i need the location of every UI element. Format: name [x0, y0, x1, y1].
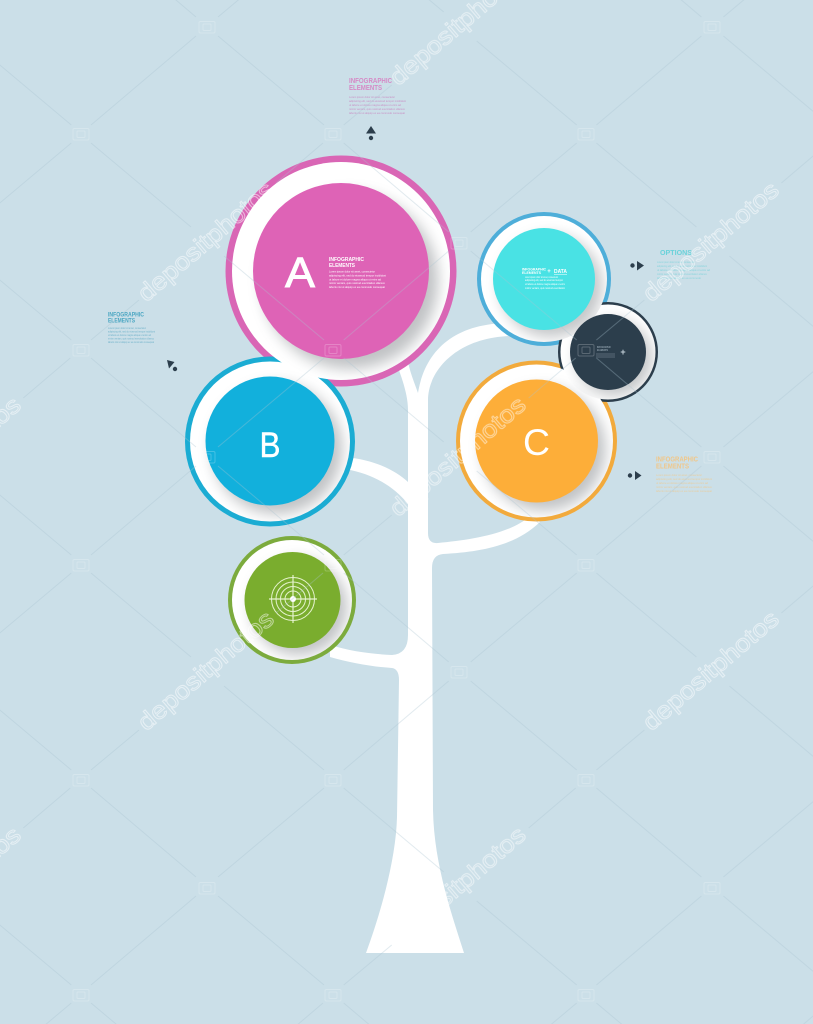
text block: left blue: Lorem ipsum dolor sit amet, consectetur	[108, 326, 146, 330]
circle data (teal): ut labore et dolore magna aliqua ut enim	[525, 283, 565, 286]
arrow: right, options	[630, 261, 644, 270]
text block: options: minim veniam, quis nostrud exercitation ullamco	[657, 272, 707, 276]
text block: left blue: ELEMENTS	[108, 318, 135, 324]
text block: options	[657, 248, 710, 280]
text block: options: OPTIONS	[660, 248, 692, 257]
icon: target	[269, 575, 317, 623]
circle data (teal): minim veniam, quis nostrud exercitation	[525, 287, 566, 290]
tree trunk and branches	[330, 323, 540, 953]
watermark text: depositphotos	[133, 176, 279, 307]
text block: top pink: minim veniam, quis nostrud exercitation ullamco	[349, 107, 405, 111]
text block: right orange: ELEMENTS	[656, 464, 689, 470]
watermark text: depositphotos	[638, 605, 784, 736]
circle options (dark)	[570, 314, 652, 396]
arrow: right, orange	[628, 471, 642, 480]
text block: right orange: INFOGRAPHIC	[656, 456, 698, 464]
text block: top pink: ELEMENTS	[349, 85, 382, 92]
circle B	[206, 376, 342, 514]
circle data (teal): DATA	[554, 269, 567, 275]
text block: left blue: minim veniam, quis nostrud exercitation ullamco	[108, 336, 154, 340]
circle A: ELEMENTS	[329, 263, 355, 269]
circle options (dark): ELEMENTS	[597, 348, 608, 352]
arrow: up	[366, 126, 376, 140]
text block: options: ut labore et dolore magna aliqua ut enim ad	[657, 268, 710, 272]
text block: top pink: Lorem ipsum dolor sit amet, consectetur	[349, 95, 395, 99]
watermark text: depositphotos	[385, 391, 531, 522]
text block: right orange: laboris nisi ut aliquip ex ea commodo consequat	[656, 489, 712, 493]
text block: top pink: ut labore et dolore magna aliqua ut enim ad	[349, 103, 401, 107]
circle data (teal): adipiscing elit, sed do eiusmod tempor	[525, 279, 563, 282]
circle data (teal)	[493, 228, 602, 337]
text block: left blue	[108, 312, 155, 344]
circle A: A	[285, 249, 315, 297]
circle A: Lorem ipsum dolor sit amet, consectetur	[329, 270, 375, 274]
text block: top pink	[349, 78, 406, 115]
text block: top pink: laboris nisi ut aliquip ex ea commodo consequat	[349, 111, 405, 115]
circle options (dark): INFOGRAPHIC	[597, 345, 612, 349]
text block: options: laboris nisi ut aliquip ex ea commodo	[657, 276, 701, 280]
circle A	[253, 183, 438, 369]
watermark text: depositphotos	[385, 821, 531, 952]
circle data (teal): INFOGRAPHIC	[522, 266, 546, 272]
text block: top pink: adipiscing elit, sed do eiusmod tempor incididunt	[349, 99, 406, 103]
circle A: ut labore et dolore magna aliqua ut enim ad	[329, 278, 381, 282]
text block: options: Lorem ipsum dolor sit amet, consectetur	[657, 260, 695, 264]
arrow: upper left	[167, 360, 177, 371]
text block: right orange	[656, 456, 712, 493]
text block: right orange: adipiscing elit, sed do eiusmod tempor incididunt	[656, 477, 712, 481]
circle data (teal): Lorem ipsum dolor sit amet, consectetur	[525, 276, 558, 279]
circle data (teal): ELEMENTS	[522, 270, 541, 275]
circle A: laboris nisi ut aliquip ex ea commodo consequat	[329, 285, 385, 289]
circle B: B	[260, 426, 280, 465]
text block: left blue: ut labore et dolore magna aliqua ut enim ad	[108, 333, 151, 337]
circle options (dark): +	[620, 347, 626, 357]
circle target (green)	[244, 552, 347, 655]
text block: right orange: minim veniam, quis nostrud exercitation ullamco	[656, 485, 712, 489]
coloured outer rings	[185, 156, 658, 664]
circle A: minim veniam, quis nostrud exercitation ullamco	[329, 281, 385, 285]
text block: top pink: INFOGRAPHIC	[349, 78, 392, 85]
text block: right orange: ut labore et dolore magna aliqua ut enim ad	[656, 481, 708, 485]
white discs inside rings	[190, 162, 656, 660]
text block: options: adipiscing elit, sed do eiusmod tempor incididunt	[657, 264, 707, 268]
circle A: adipiscing elit, sed do eiusmod tempor incididunt	[329, 274, 386, 278]
text block: right orange: Lorem ipsum dolor sit amet, consectetur	[656, 473, 702, 477]
circle C: C	[523, 422, 550, 463]
watermark text: depositphotos	[638, 176, 784, 307]
circle C	[475, 380, 606, 510]
text block: left blue: laboris nisi ut aliquip ex ea commodo consequat	[108, 340, 154, 344]
text block: left blue: adipiscing elit, sed do eiusmod tempor incididunt	[108, 330, 155, 334]
text block: left blue: INFOGRAPHIC	[108, 312, 145, 318]
circle data (teal): +	[547, 269, 551, 275]
watermark text: depositphotos	[133, 605, 279, 736]
circle A: INFOGRAPHIC	[329, 257, 364, 263]
